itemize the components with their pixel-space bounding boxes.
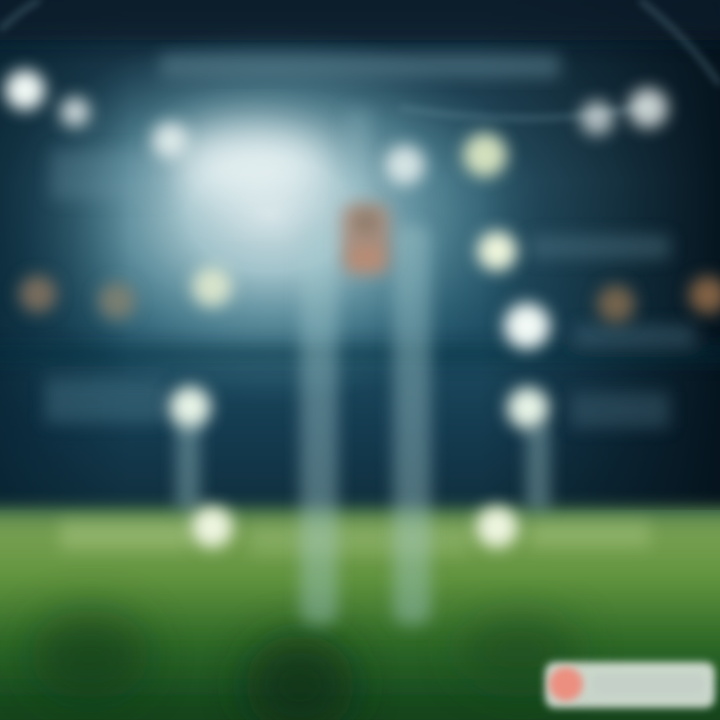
central light glow bbox=[0, 25, 540, 405]
side vignette bbox=[0, 0, 720, 510]
watermark badge bbox=[545, 662, 715, 708]
orange side nodes bbox=[19, 275, 720, 323]
grass field bbox=[0, 508, 720, 720]
bright light nodes bbox=[5, 70, 668, 548]
central vertical columns bbox=[300, 110, 431, 625]
curved roof lines bbox=[0, 0, 720, 118]
side vertical connectors bbox=[176, 420, 550, 510]
central orange badge bbox=[342, 203, 390, 275]
horizontal dim text bands bbox=[0, 150, 720, 428]
title bar bbox=[160, 54, 560, 78]
